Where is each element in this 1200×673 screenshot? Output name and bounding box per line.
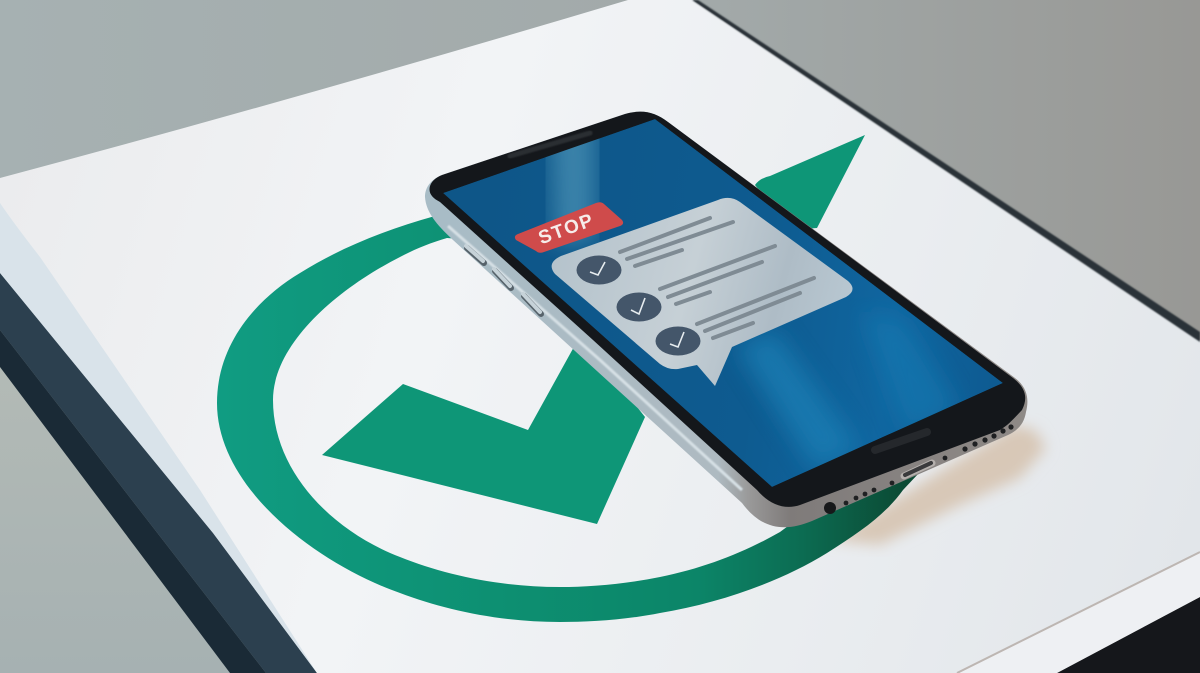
side buttons xyxy=(466,246,541,314)
phone xyxy=(425,112,1027,527)
STOP text: STOP xyxy=(536,210,597,249)
document: fold line bottom right xyxy=(957,552,1200,673)
charging port xyxy=(904,463,932,476)
phone body: frame highlight xyxy=(448,226,742,490)
document: under sheet xyxy=(0,200,330,673)
STOP badge xyxy=(515,202,623,253)
icon: green checkmark xyxy=(322,135,897,524)
phone screen xyxy=(443,115,1003,487)
folder: dark spine lower face xyxy=(0,330,266,673)
folder: dark edge top right xyxy=(692,0,1200,342)
phone speaker: top xyxy=(510,133,590,156)
folder: dark spine upper face xyxy=(0,273,317,673)
check item 1 xyxy=(576,218,733,284)
bottom speaker slot xyxy=(875,432,927,450)
phone front: black bezel xyxy=(429,112,1025,507)
icon: green circle ring xyxy=(217,150,1000,622)
screen light streak left xyxy=(550,115,595,245)
speaker holes xyxy=(844,424,1014,505)
check item 2 xyxy=(616,246,775,322)
check item 3 xyxy=(656,278,814,356)
background: lower-left desk xyxy=(0,340,300,673)
document: lower right sheet xyxy=(950,548,1200,673)
message bubble xyxy=(552,198,853,386)
screen light streak lower xyxy=(735,330,860,470)
headphone jack xyxy=(824,502,836,514)
phone body: metal frame xyxy=(425,112,1027,527)
folder: black corner bottom right xyxy=(1057,597,1200,673)
screen light streak right xyxy=(872,320,960,430)
phone shadow on paper xyxy=(830,425,1046,545)
